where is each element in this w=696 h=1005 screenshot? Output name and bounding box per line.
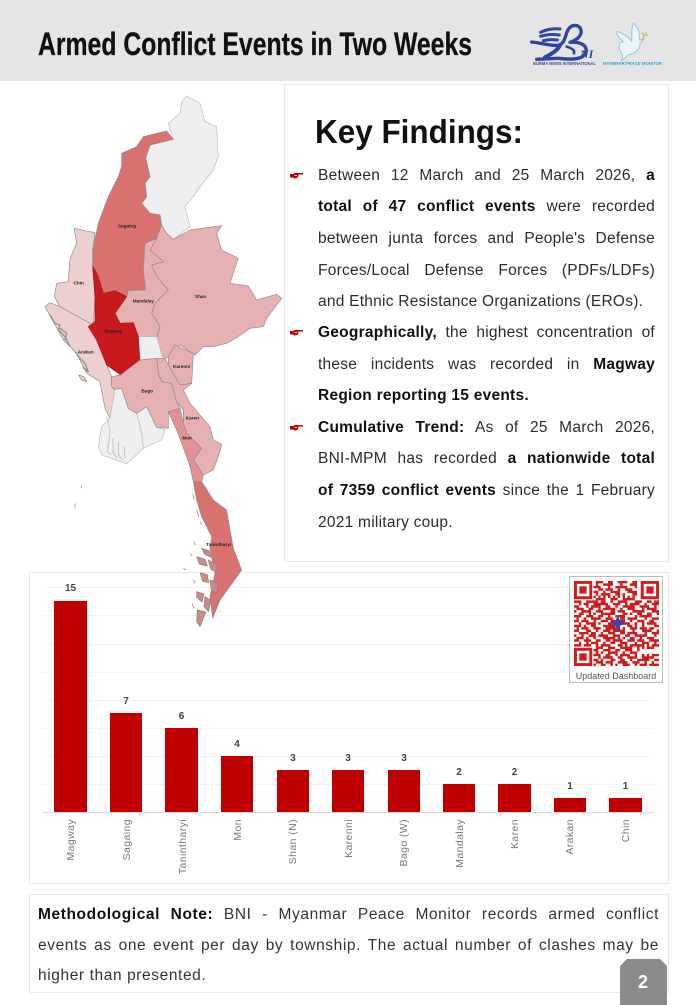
page number tab: 2 — [638, 972, 648, 992]
text block: finding 1: Between 12 March and 25 March 2026, a — [318, 167, 655, 184]
region: Karen — [157, 358, 222, 475]
panel: methodological note: higher than presented. — [38, 967, 206, 984]
panel: methodological note — [29, 894, 669, 993]
region: Mon — [168, 408, 203, 482]
text block: finding 3: of 7359 conflict events since the 1 February — [318, 482, 655, 499]
bar chart: Mandalay — [454, 819, 466, 868]
header band — [0, 0, 696, 81]
region: Shan — [150, 225, 282, 360]
bar chart: 2 — [512, 767, 518, 778]
text block: finding 3 — [290, 419, 655, 531]
bar chart: 1 — [567, 781, 573, 792]
region: Tanintharyi — [193, 482, 242, 618]
logo: Burma News International — [530, 24, 596, 66]
region: Karenni — [168, 345, 193, 385]
QR code — [574, 581, 659, 666]
text block: finding 2 — [290, 324, 655, 404]
region: Chin — [54, 228, 95, 325]
panel: key findings — [284, 84, 669, 562]
text block: finding 2: these incidents was recorded in Magway — [318, 356, 655, 373]
text block: finding 2: Region reporting 15 events. — [318, 387, 529, 404]
bar chart: 7 — [123, 696, 129, 707]
bar chart: 3 — [345, 753, 351, 764]
map labels: Karen — [186, 415, 199, 420]
map of Myanmar — [44, 96, 282, 627]
bar chart: Magway — [65, 819, 77, 860]
bar chart: 3 — [290, 753, 296, 764]
map labels: Sagaing — [118, 223, 136, 228]
bar chart: Arakan — [564, 819, 576, 855]
region: Naypyitaw — [138, 337, 163, 360]
note text — [38, 906, 659, 984]
bar chart: Sagaing — [121, 819, 133, 860]
map labels: Chin — [73, 280, 84, 285]
logo: Myanmar Peace Monitor — [603, 22, 663, 66]
icon: pointing hand 2 — [290, 330, 303, 336]
map labels: Shan — [195, 294, 207, 299]
text block: finding 1: total of 47 conflict events were recorded — [318, 198, 655, 215]
bar chart: 1 — [623, 781, 629, 792]
bar chart: 4 — [234, 739, 240, 750]
text block: finding 1: Forces/Local Defense Forces (PDFs/LDFs) — [318, 262, 655, 279]
text block: finding 3: BNI-MPM has recorded a nationwide total — [318, 450, 655, 467]
icon: pointing hand 1 — [290, 173, 303, 178]
region: Bago — [112, 358, 180, 428]
bar chart: 6 — [179, 711, 185, 722]
region: Sagaing — [93, 131, 173, 297]
text block: finding 3: Cumulative Trend: As of 25 March 2026, — [318, 419, 655, 436]
bar chart: 15 — [65, 583, 76, 594]
panel: bar chart — [29, 572, 669, 884]
bar chart: Karen — [509, 819, 521, 849]
region: Arakan — [45, 303, 115, 418]
logo: Burma News International: NI — [579, 47, 595, 61]
bar chart: Tanintharyi — [177, 819, 189, 874]
map labels: Arakan — [78, 349, 94, 354]
bar chart — [42, 583, 654, 874]
region: Kachin — [142, 96, 218, 239]
map labels — [73, 223, 231, 547]
region: Mandalay — [115, 238, 168, 337]
map labels: Tanintharyi — [206, 542, 231, 547]
QR caption: Updated Dashboard — [576, 671, 656, 681]
panel: methodological note: Methodological Note: BNI - Myanmar Peace Monitor records armed conflict — [38, 906, 659, 923]
map labels: Magway — [104, 329, 123, 334]
text block: finding 1 — [290, 167, 655, 310]
islands — [75, 375, 218, 627]
text block: finding 3: 2021 military coup. — [318, 514, 453, 531]
map labels: Mon — [182, 436, 192, 441]
QR code card — [569, 576, 663, 683]
region: Ayeyarwady — [98, 388, 165, 464]
bar chart: Mon — [232, 819, 244, 841]
map labels: Karenni — [173, 364, 190, 369]
bar chart: Shan (N) — [287, 819, 299, 864]
bar chart: 2 — [456, 767, 462, 778]
bar chart: Bago (W) — [398, 819, 410, 867]
text block: finding 1: between junta forces and People's Defense — [318, 230, 655, 247]
logo: Myanmar Peace Monitor: MYANMAR PEACE MONITOR — [603, 61, 663, 66]
bar chart: 3 — [401, 753, 407, 764]
region: Magway — [88, 266, 140, 375]
map labels: Mandalay — [133, 298, 154, 303]
text block: finding 1: and Ethnic Resistance Organizations (EROs). — [318, 293, 643, 310]
text block: finding 2: Geographically, the highest concentration of — [318, 324, 655, 341]
bar chart: Karenni — [343, 819, 355, 858]
page number tab — [620, 959, 667, 1005]
heading: key findings: Key Findings: — [315, 113, 523, 150]
panel: methodological note: events as one event per day by township. The actual number of clashes may be — [38, 937, 659, 954]
map labels: Bago — [142, 388, 153, 393]
bar chart: Chin — [620, 819, 632, 842]
icon: pointing hand 3 — [290, 425, 303, 430]
